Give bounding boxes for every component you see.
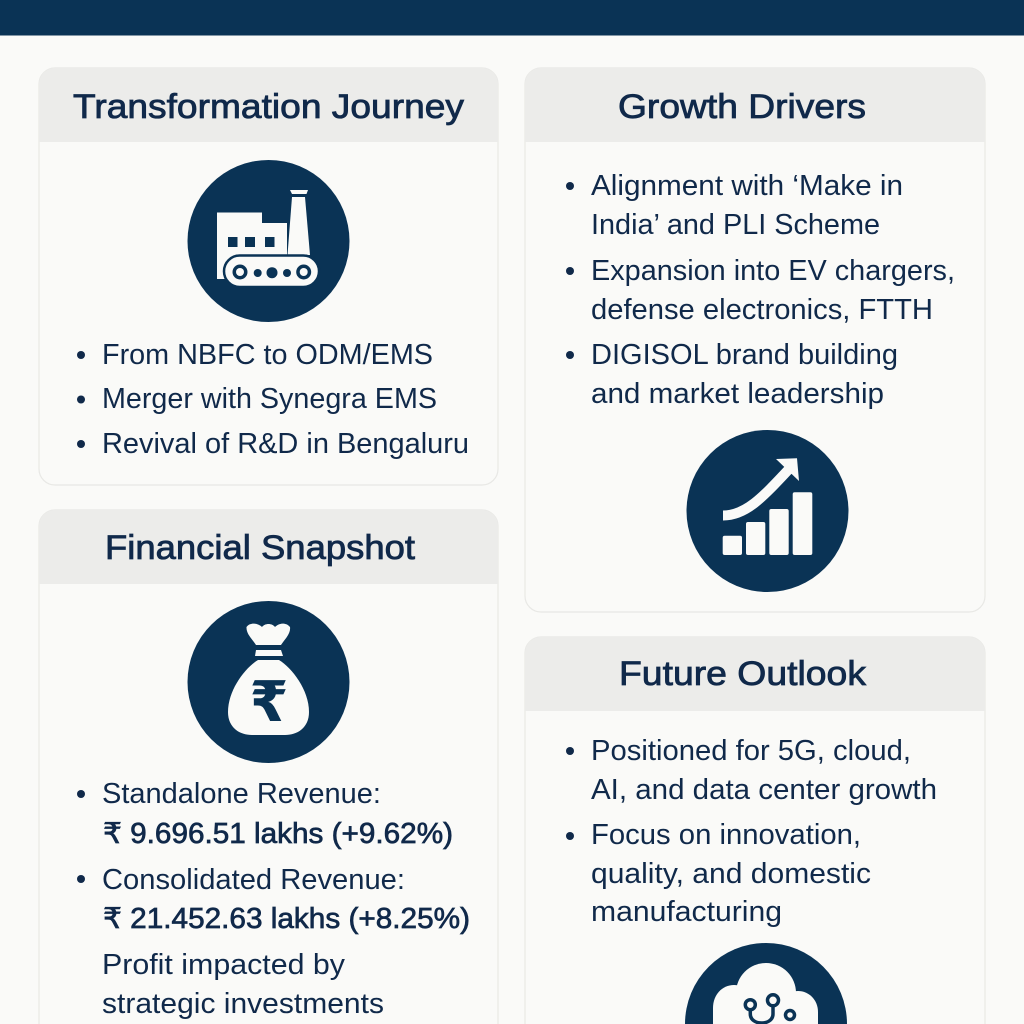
- bullet list: [566, 170, 955, 410]
- panel card: [39, 510, 498, 1024]
- bullet list: [566, 735, 937, 928]
- bullet list: [77, 339, 469, 460]
- icon: cloud with circuit nodes: [685, 943, 847, 1024]
- panel: transformation journey: [39, 68, 498, 485]
- bullet list: AI, and data center growth: [591, 774, 937, 806]
- heading: Financial Snapshot: [105, 529, 416, 567]
- heading: Growth Drivers: [618, 88, 866, 126]
- bullet list: Standalone Revenue:: [102, 778, 381, 810]
- panel: future outlook: [525, 637, 985, 1024]
- panel card: [525, 68, 985, 612]
- bullet list: Consolidated Revenue:: [102, 864, 405, 896]
- heading: Future Outlook: [619, 655, 867, 693]
- bullet list: Merger with Synegra EMS: [102, 383, 437, 415]
- panel header band: [525, 68, 985, 142]
- panel header band: [39, 68, 498, 142]
- bullet list: Profit impacted by: [102, 949, 346, 981]
- bullet list: defense electronics, FTTH: [591, 294, 933, 326]
- panel header band: [39, 510, 498, 584]
- bullet list: and market leadership: [591, 378, 884, 410]
- bullet list: quality, and domestic: [591, 858, 871, 890]
- bullet list: ₹ 21.452.63 lakhs (+8.25%): [103, 903, 470, 935]
- bullet list: Positioned for 5G, cloud,: [591, 735, 911, 767]
- bullet list: DIGISOL brand building: [591, 339, 898, 371]
- bullet list: Alignment with ‘Make in: [591, 170, 903, 202]
- bullet list: strategic investments: [102, 988, 384, 1020]
- bullet list: Expansion into EV chargers,: [591, 255, 955, 287]
- panel card: [39, 68, 498, 485]
- bullet list: manufacturing: [591, 896, 782, 928]
- panel: financial snapshot: [39, 510, 498, 1024]
- icon: money bag with rupee: ₹: [250, 670, 288, 733]
- icon: factory with conveyor: [188, 160, 350, 322]
- bullet list: India’ and PLI Scheme: [591, 209, 880, 241]
- bullet list: Revival of R&D in Bengaluru: [102, 428, 469, 460]
- panel header band: [525, 637, 985, 711]
- icon: rising bar chart with arrow: [686, 430, 848, 592]
- bullet list: From NBFC to ODM/EMS: [102, 339, 433, 371]
- top banner: [0, 0, 1024, 36]
- bullet list: Focus on innovation,: [591, 819, 861, 851]
- panel: growth drivers: [525, 68, 985, 612]
- bullet list: [77, 778, 470, 1020]
- heading: Transformation Journey: [73, 88, 464, 126]
- icon: money bag with rupee: [188, 601, 350, 763]
- panel card: [525, 637, 985, 1024]
- bullet list: ₹ 9.696.51 lakhs (+9.62%): [103, 818, 453, 850]
